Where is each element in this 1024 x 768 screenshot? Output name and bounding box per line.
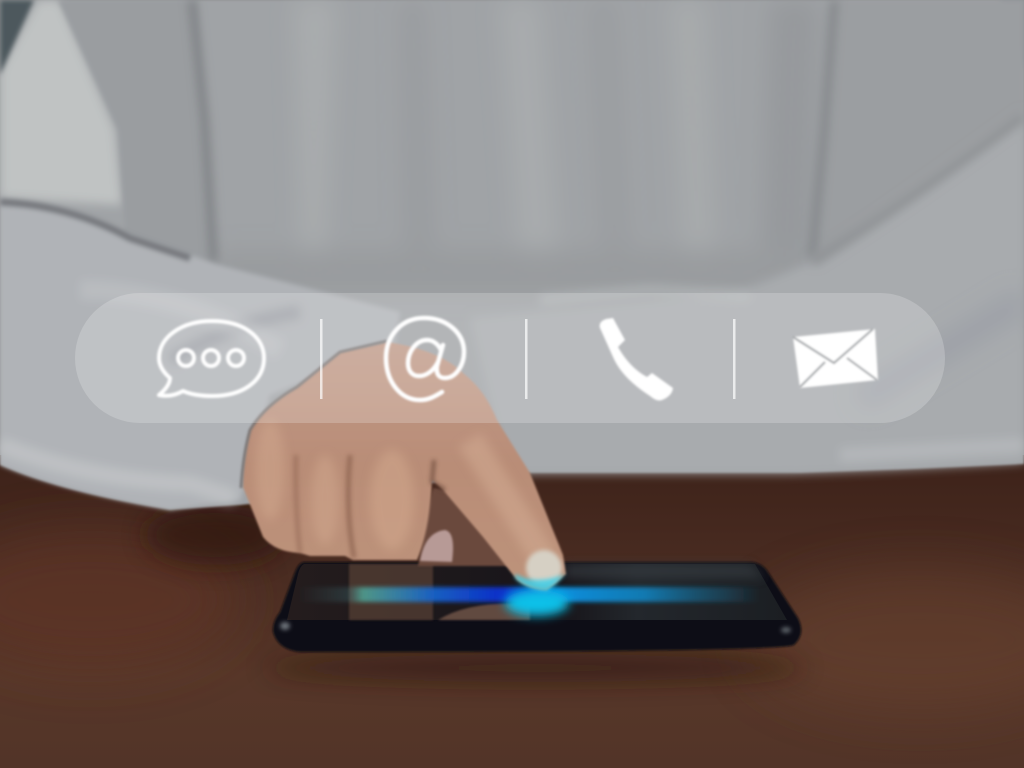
divider bbox=[733, 319, 736, 399]
light beam bbox=[298, 587, 760, 602]
sweater base bbox=[0, 0, 1024, 510]
edge highlights bbox=[280, 622, 290, 630]
fingertip glow bbox=[515, 574, 566, 591]
divider bbox=[525, 319, 528, 399]
icon: envelope bbox=[793, 329, 878, 388]
right forearm bbox=[470, 110, 1024, 473]
right upper sleeve bbox=[812, 0, 1024, 262]
sweater torso folds bbox=[215, 0, 820, 295]
person in grey sweater bbox=[0, 0, 1024, 510]
fingernail bbox=[526, 550, 562, 586]
hand bbox=[241, 341, 566, 591]
translucent icon bar bbox=[75, 293, 945, 423]
left upper sleeve bbox=[58, 0, 215, 262]
smartphone bbox=[273, 562, 801, 652]
cuff shadow line bbox=[241, 341, 387, 488]
divider bbox=[320, 319, 322, 399]
thumb behind finger bbox=[418, 488, 510, 566]
screen bbox=[287, 564, 787, 620]
hand body bbox=[243, 342, 566, 590]
icon: chat bubble bbox=[159, 321, 264, 396]
background top right bbox=[1000, 0, 1024, 70]
wooden table bbox=[0, 455, 1024, 768]
icon: at sign bbox=[386, 318, 464, 400]
left forearm bbox=[0, 200, 400, 510]
icon: telephone handset bbox=[600, 318, 673, 400]
background top left bbox=[0, 0, 122, 205]
finger creases bbox=[296, 455, 300, 553]
